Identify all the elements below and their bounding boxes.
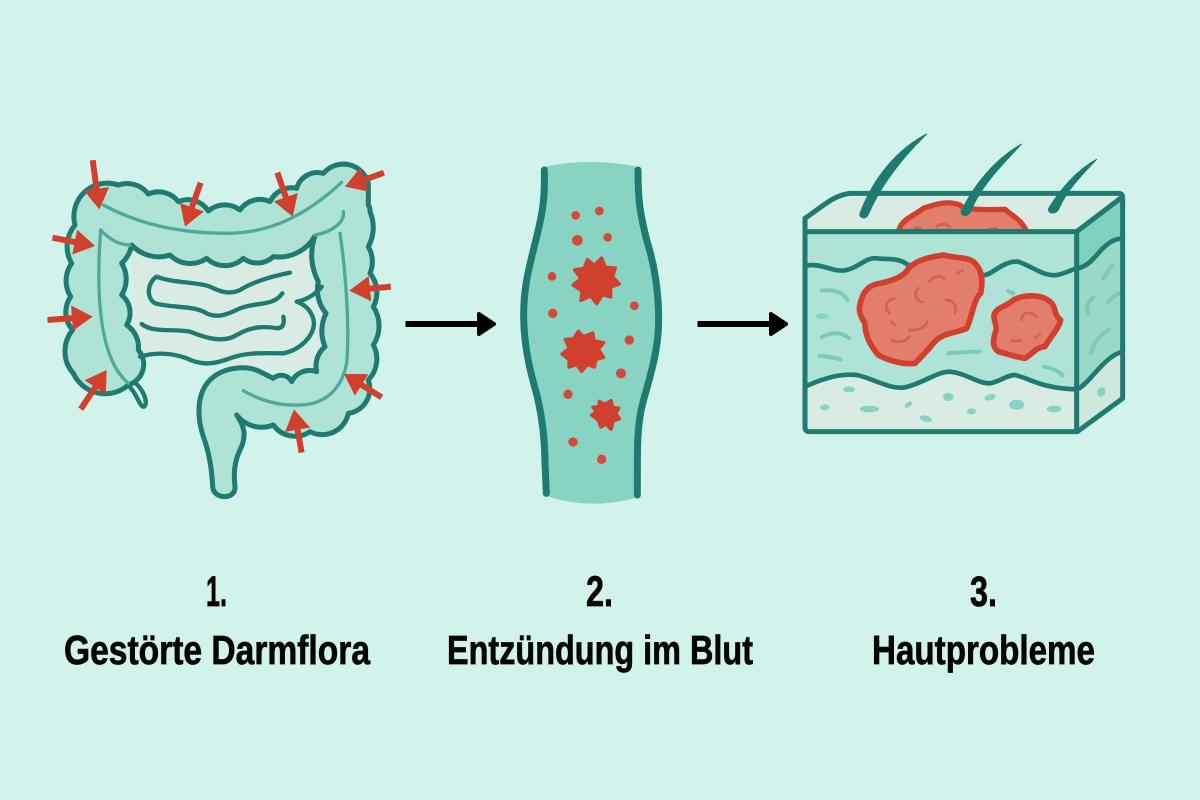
illustration: skin block with lesions <box>805 134 1123 432</box>
vessel body <box>523 162 658 504</box>
vessel walls <box>524 170 659 495</box>
label 1: Gestörte Darmflora <box>64 627 371 673</box>
label 3: 3. <box>970 568 997 616</box>
lesion texture <box>886 224 1040 342</box>
large lesion <box>859 255 982 364</box>
small lesion <box>994 296 1061 358</box>
inflammation dots <box>548 207 639 464</box>
dermal blobs <box>816 314 1107 423</box>
arrow: gut to blood <box>406 314 494 334</box>
small intestine background <box>130 235 328 377</box>
label 3 <box>872 568 1095 673</box>
appendix <box>127 382 146 407</box>
colon outline <box>65 164 379 497</box>
label 3: Hautprobleme <box>872 627 1095 673</box>
inflammation cells <box>562 258 619 429</box>
front face layers <box>805 232 1077 432</box>
label 1: 1. <box>206 568 227 616</box>
arrow: blood to skin <box>698 314 786 334</box>
label 2 <box>447 568 753 673</box>
illustration: blood vessel with inflammation <box>523 162 659 504</box>
top lesion <box>898 203 1027 232</box>
skin layer waves <box>805 238 1123 389</box>
tissue fibres <box>819 266 1119 375</box>
red pressure arrows <box>47 158 392 455</box>
colon inner folds <box>99 182 348 405</box>
label 2: 2. <box>586 568 613 616</box>
label 2: Entzündung im Blut <box>447 627 753 673</box>
side face layers <box>1077 197 1123 432</box>
skin top face <box>805 193 1121 232</box>
small intestine loops <box>140 273 322 363</box>
label 1 <box>64 568 371 673</box>
hairs <box>860 134 1097 218</box>
skin block outline <box>805 193 1123 432</box>
illustration: gut with red arrows <box>47 158 392 497</box>
